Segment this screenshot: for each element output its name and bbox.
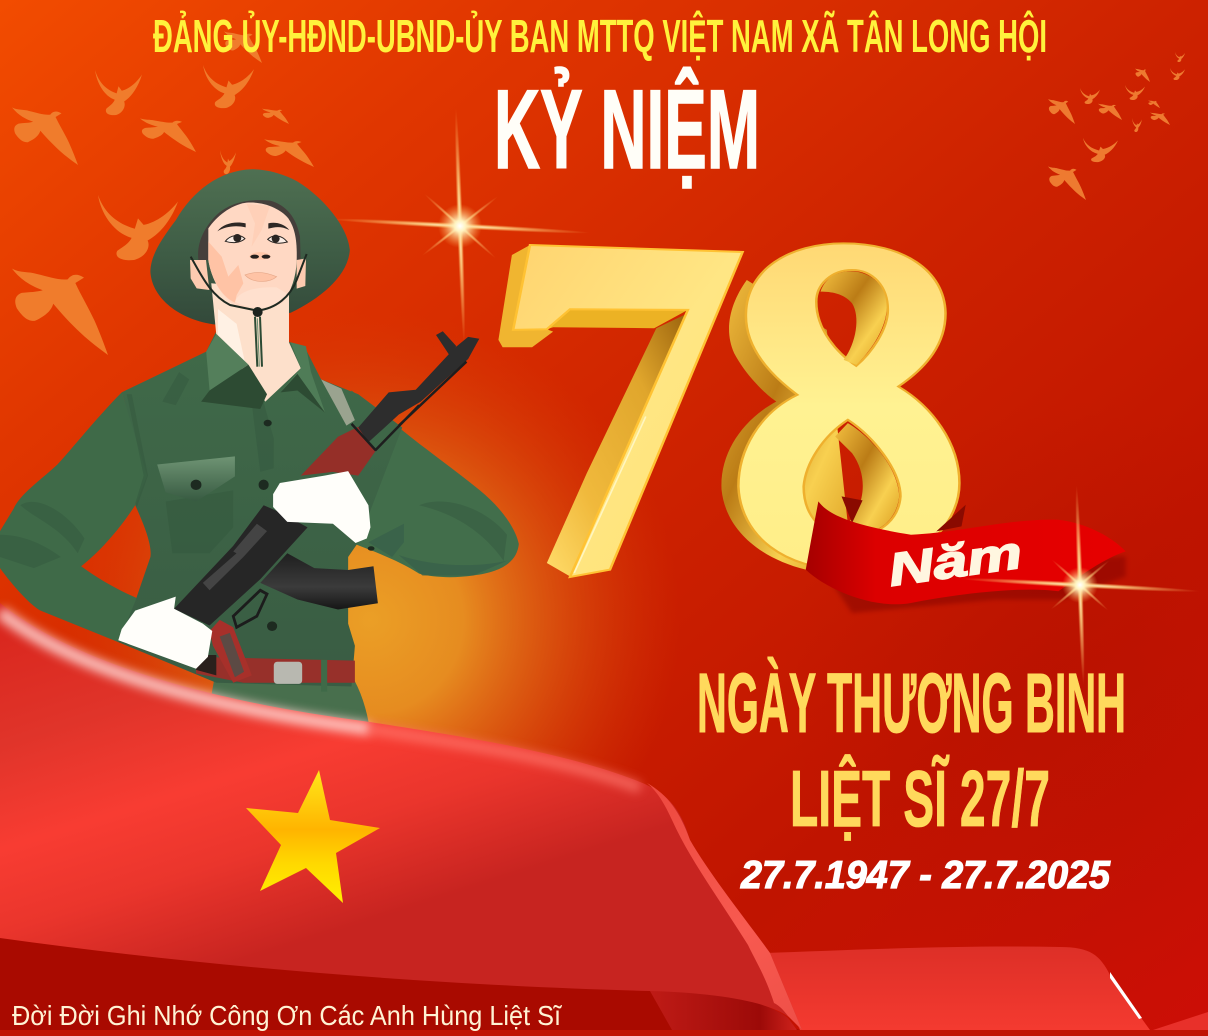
doves left xyxy=(12,31,314,355)
date range: 27.7.1947 - 27.7.2025 xyxy=(740,854,1111,897)
doves right xyxy=(1048,52,1185,200)
left arm xyxy=(0,392,149,642)
main flag face xyxy=(0,603,802,1030)
shirt shadows xyxy=(0,372,507,568)
bottom band xyxy=(0,1030,1208,1036)
torso xyxy=(118,331,402,686)
gloves xyxy=(118,471,370,669)
sling xyxy=(321,379,355,426)
flag xyxy=(0,603,1208,1036)
footer slogan: Đời Đời Ghi Nhớ Công Ơn Các Anh Hùng Liệt Sĩ xyxy=(12,1000,562,1031)
trousers xyxy=(210,668,370,731)
digit 7 xyxy=(498,245,743,577)
collar, pocket, belt, rifle, gloves xyxy=(118,331,479,692)
neck xyxy=(211,283,301,402)
digit 8 xyxy=(721,243,959,570)
hat xyxy=(150,169,350,325)
inner walls of the 8 xyxy=(820,271,887,365)
lower fold xyxy=(650,991,797,1030)
buttons xyxy=(191,420,375,631)
rifle xyxy=(174,331,479,683)
collar xyxy=(206,334,248,390)
uniform and hat xyxy=(0,169,519,731)
flag star xyxy=(246,770,380,903)
sparkle: ribbon star xyxy=(960,485,1200,685)
hair xyxy=(198,200,301,280)
head xyxy=(190,200,307,367)
soldier xyxy=(0,169,519,731)
fold edge xyxy=(647,783,802,1030)
second flag ribbon xyxy=(765,947,1150,1030)
chin strap and cord xyxy=(191,254,307,311)
face xyxy=(208,203,297,308)
gold number 78 xyxy=(498,243,959,577)
heading: Kỷ niệm: KỶ NIỆM xyxy=(494,67,760,192)
facial features xyxy=(217,222,289,281)
right arm xyxy=(324,390,519,577)
dark lower banner xyxy=(0,925,1208,1036)
sparkle: upper star xyxy=(330,108,590,344)
ribbon label: Năm xyxy=(885,526,1025,596)
belt xyxy=(196,655,355,692)
highlight along top edge xyxy=(0,612,370,729)
ribbon Năm xyxy=(806,496,1126,613)
ears xyxy=(190,258,306,290)
pocket xyxy=(157,456,235,502)
